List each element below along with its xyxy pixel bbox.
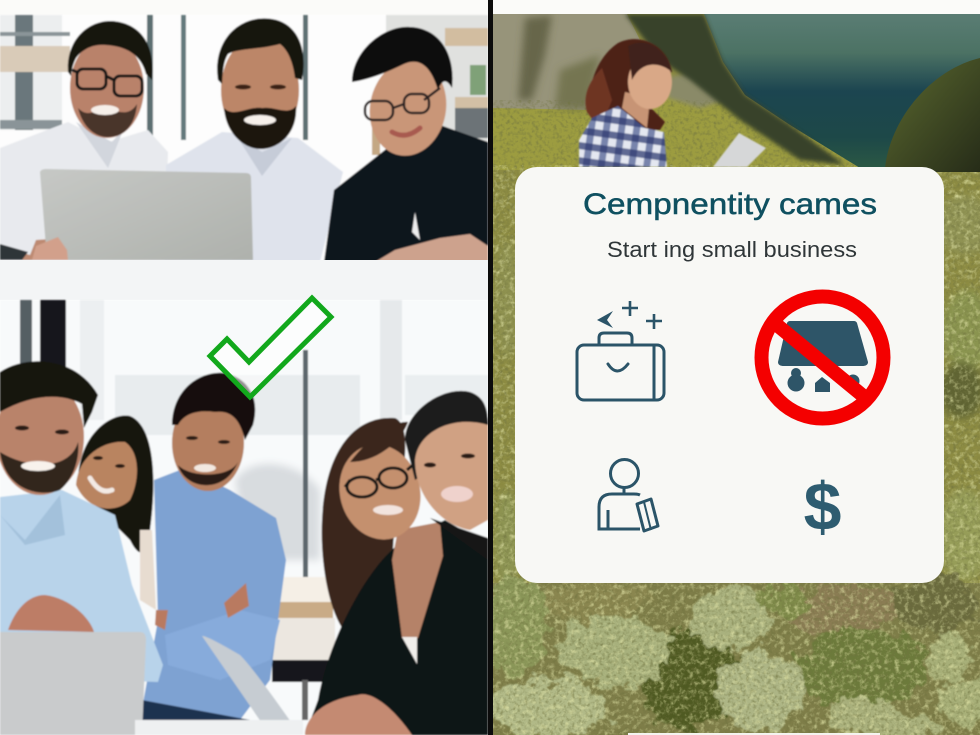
grassy slope (493, 98, 858, 170)
card subtitle: Start ing small business (607, 237, 857, 262)
distant valley (704, 14, 980, 168)
foreground shrubs (481, 575, 980, 735)
right hill (885, 58, 980, 172)
foreground ground (493, 583, 980, 735)
hand on laptop (32, 237, 68, 260)
person: woman with glasses (305, 418, 488, 735)
icon: suitcase with sparkles (577, 301, 664, 400)
person: right person in black (324, 27, 488, 262)
right side meadow (495, 195, 980, 590)
dark forest ridge (625, 14, 845, 165)
photo: three colleagues at a laptop (0, 15, 488, 262)
white band between photos (0, 260, 488, 300)
person: left man in white shirt (0, 21, 168, 262)
laptop front (0, 632, 146, 735)
person: front man in light blue shirt (0, 361, 163, 682)
table (135, 720, 303, 735)
icon: dollar sign: $ (804, 469, 841, 545)
person: woman behind (76, 415, 156, 610)
person: woman on right (405, 391, 488, 560)
top strip (0, 0, 980, 15)
card (515, 167, 944, 583)
icon: prohibited market stall (762, 296, 884, 418)
vertical divider (488, 0, 493, 735)
tablet (713, 133, 766, 167)
icon: person with books (599, 460, 658, 531)
card title: Cempnentity cames (583, 188, 877, 221)
person: centre man in blue shirt (140, 373, 286, 720)
photo: five colleagues smiling (0, 300, 488, 735)
photo: mountain meadow (481, 14, 980, 735)
open laptop (202, 636, 300, 735)
person: woman with tablet (579, 39, 766, 167)
laptop (40, 169, 253, 260)
person: centre man with beard (165, 18, 343, 262)
rock face (493, 14, 640, 110)
green check mark (210, 298, 331, 397)
